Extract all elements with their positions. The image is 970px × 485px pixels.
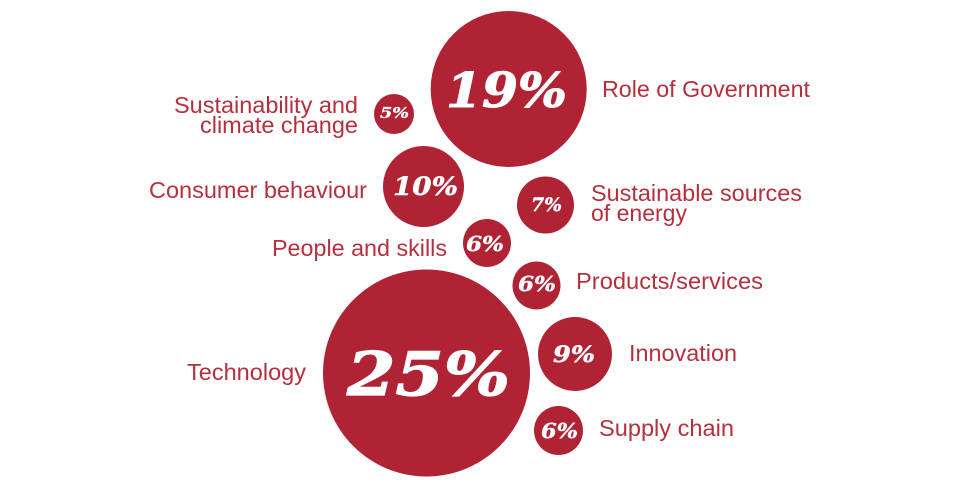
label: Sustainability and climate change: Sustainability and bbox=[174, 92, 358, 118]
label: Products/services: Products/services bbox=[576, 268, 763, 294]
label: Consumer behaviour: Consumer behaviour bbox=[149, 177, 367, 203]
bubble: Products/services: 6% bbox=[518, 272, 556, 296]
bubble: People and skills: 6% bbox=[466, 232, 504, 256]
bubble: Role of Government bbox=[431, 11, 587, 167]
label: Sustainable sources of energy bbox=[591, 180, 802, 226]
bubble: Sustainable sources of energy: 7% bbox=[531, 195, 562, 216]
bubble: Technology bbox=[323, 270, 530, 476]
bubble: Products/services bbox=[512, 262, 560, 310]
bubble: People and skills bbox=[463, 219, 511, 267]
bubble: Supply chain: 6% bbox=[541, 419, 578, 443]
label: People and skills: People and skills bbox=[272, 235, 447, 261]
bubble: Role of Government: 19% bbox=[446, 63, 567, 119]
bubble: Technology: 25% bbox=[346, 340, 510, 410]
label: Sustainability and climate change bbox=[174, 92, 358, 138]
bubble: Consumer behaviour bbox=[383, 146, 464, 227]
bubble: Supply chain bbox=[534, 406, 583, 455]
label: Sustainability and climate change: climate change bbox=[200, 112, 358, 138]
label: Role of Government: Role of Government bbox=[602, 76, 811, 102]
label: Supply chain: Supply chain bbox=[599, 415, 734, 441]
bubble: Sustainable sources of energy bbox=[517, 176, 574, 234]
bubble: Innovation bbox=[538, 317, 612, 391]
bubble: Consumer behaviour: 10% bbox=[393, 172, 458, 201]
bubble: Sustainability and climate change: 5% bbox=[380, 105, 409, 122]
label: Technology: Technology bbox=[187, 359, 307, 385]
bubble: Sustainability and climate change bbox=[374, 94, 414, 134]
label: Innovation: Innovation bbox=[629, 340, 737, 366]
label: Sustainable sources of energy: Sustainable sources bbox=[591, 180, 802, 206]
bubble: Innovation: 9% bbox=[553, 342, 595, 368]
label: Sustainable sources of energy: of energy bbox=[591, 200, 687, 226]
